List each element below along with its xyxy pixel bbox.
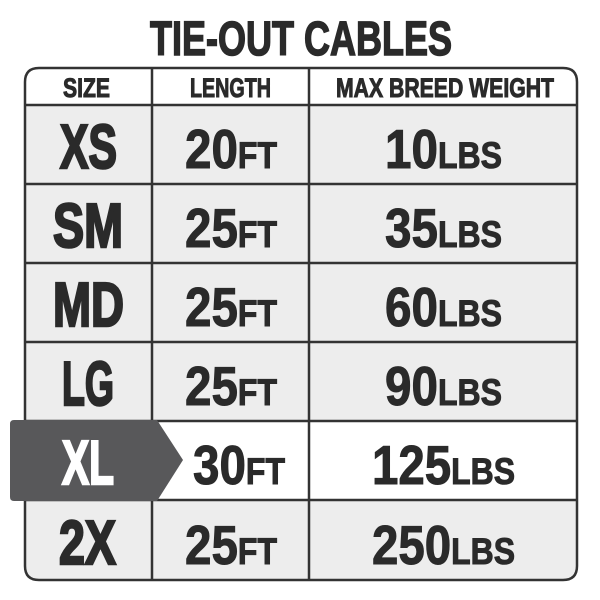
header row: SIZE bbox=[63, 73, 110, 103]
header row bbox=[63, 73, 554, 103]
weight column: 90LBS bbox=[385, 355, 502, 417]
length column: 25FT bbox=[185, 355, 277, 417]
weight column: 250LBS bbox=[372, 514, 515, 576]
table bbox=[25, 68, 577, 580]
weight column bbox=[372, 118, 515, 576]
weight column: 35LBS bbox=[385, 197, 502, 259]
weight column: 125LBS bbox=[372, 434, 515, 496]
length column: 20FT bbox=[185, 118, 277, 180]
size column: XS bbox=[60, 113, 117, 182]
size column: XL bbox=[62, 429, 114, 498]
length column: 25FT bbox=[185, 276, 277, 338]
title: TIE-OUT CABLES bbox=[150, 13, 452, 66]
size column: SM bbox=[53, 192, 123, 261]
length column bbox=[185, 118, 285, 576]
weight column: 60LBS bbox=[385, 276, 502, 338]
header row: LENGTH bbox=[190, 73, 271, 103]
length column: 30FT bbox=[193, 434, 285, 496]
length column: 25FT bbox=[185, 197, 277, 259]
length column: 25FT bbox=[185, 514, 277, 576]
size column: MD bbox=[53, 271, 124, 340]
size column: LG bbox=[62, 350, 114, 419]
size column: 2X bbox=[59, 509, 116, 578]
size column bbox=[53, 113, 124, 578]
weight column: 10LBS bbox=[385, 118, 502, 180]
XL highlight marker bbox=[10, 420, 183, 501]
